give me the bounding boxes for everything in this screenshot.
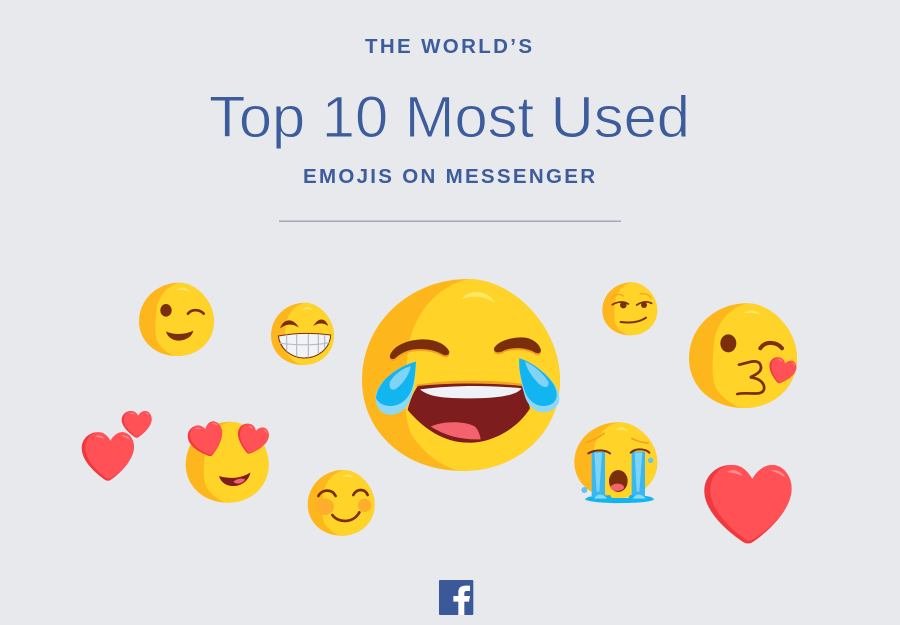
subheading: emojis on messenger: EMOJIS ON MESSENGER [303, 165, 595, 188]
icon: big red heart [704, 465, 792, 543]
icon: pair of hearts [82, 411, 152, 481]
icon: blushing smile emoji [308, 470, 375, 536]
title block [209, 35, 690, 188]
icon: blowing kiss emoji [689, 303, 798, 408]
heading: top 10 most used: Top 10 Most Used [209, 85, 690, 150]
heading: the world's: THE WORLD’S [365, 35, 532, 58]
icon: heart eyes emoji [185, 420, 271, 503]
icon: facebook logo [439, 580, 473, 615]
icon: tears of joy emoji [362, 279, 560, 471]
icon: smirking emoji [602, 282, 657, 335]
icon: winking emoji [139, 283, 214, 356]
icon: loudly crying emoji [574, 422, 657, 503]
icon: grinning teeth emoji [271, 303, 334, 365]
